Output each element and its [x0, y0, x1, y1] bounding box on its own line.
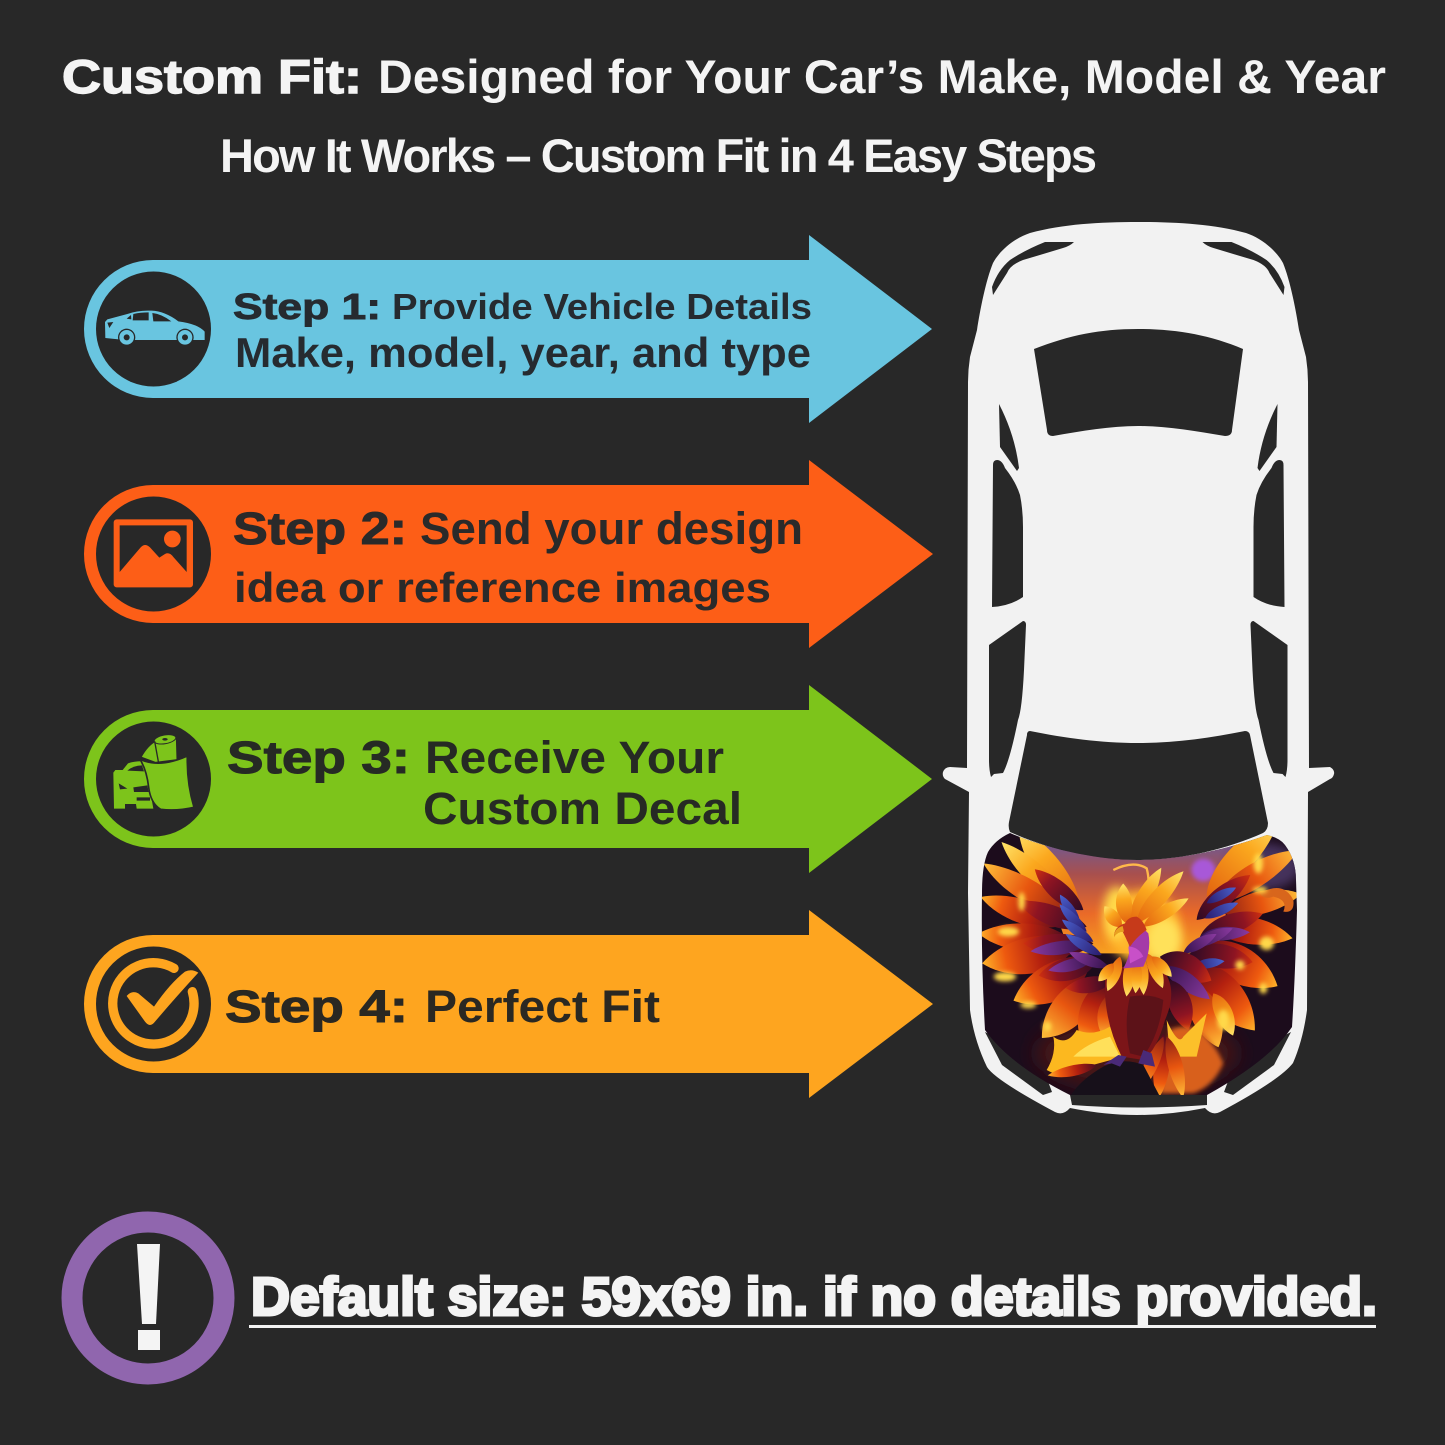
heading: custom fit: Custom Fit: [62, 50, 362, 103]
glowing feather tips [994, 853, 1274, 1032]
icon: sedan car [105, 311, 205, 346]
heading: custom fit: Designed for Your Car’s Make, Model & Year [378, 50, 1386, 103]
step 1 text [233, 286, 812, 376]
left wing feathers [982, 836, 1112, 1038]
hood decal: phoenix artwork [982, 833, 1297, 1095]
icon: car and vinyl roll [113, 733, 194, 810]
car windows [985, 242, 1291, 1108]
phoenix head and crest [1104, 868, 1188, 946]
subheading: how it works: How It Works – Custom Fit in 4 Easy Steps [220, 129, 1097, 182]
step 2 text: Send your design [420, 503, 803, 554]
step 3 arrow [84, 685, 932, 873]
step 3 text: Custom Decal [423, 783, 742, 834]
sky and glow [1030, 840, 1300, 1090]
lower flames [1047, 989, 1242, 1093]
step 3 text: Receive Your [425, 732, 724, 783]
right wing feathers [1160, 835, 1297, 1048]
icon: picture [114, 519, 193, 587]
default size note: Default size: 59x69 in. if no details provided. [251, 1267, 1377, 1327]
tail and rock [1047, 1033, 1191, 1101]
step 2 text: Step 2: [233, 503, 407, 554]
step 1 text: Make, model, year, and type [235, 329, 811, 376]
step 2 arrow [84, 460, 933, 648]
step 3 text [227, 732, 742, 834]
phoenix body [1098, 930, 1172, 1067]
step 2 text [233, 503, 803, 611]
car body [943, 222, 1334, 1115]
step 4 text: Perfect Fit [425, 981, 660, 1032]
warning icon [72, 1222, 224, 1374]
step 3 text: Step 3: [227, 732, 410, 783]
car top view [943, 222, 1334, 1115]
step 4 text [225, 981, 660, 1032]
step 4 text: Step 4: [225, 981, 408, 1032]
icon: check mark [113, 963, 198, 1044]
step 1 text: Provide Vehicle Details [392, 286, 812, 327]
step 2 text: idea or reference images [234, 564, 771, 611]
step 4 arrow [84, 910, 933, 1098]
step 1 text: Step 1: [233, 286, 381, 327]
step 1 arrow [84, 235, 932, 423]
